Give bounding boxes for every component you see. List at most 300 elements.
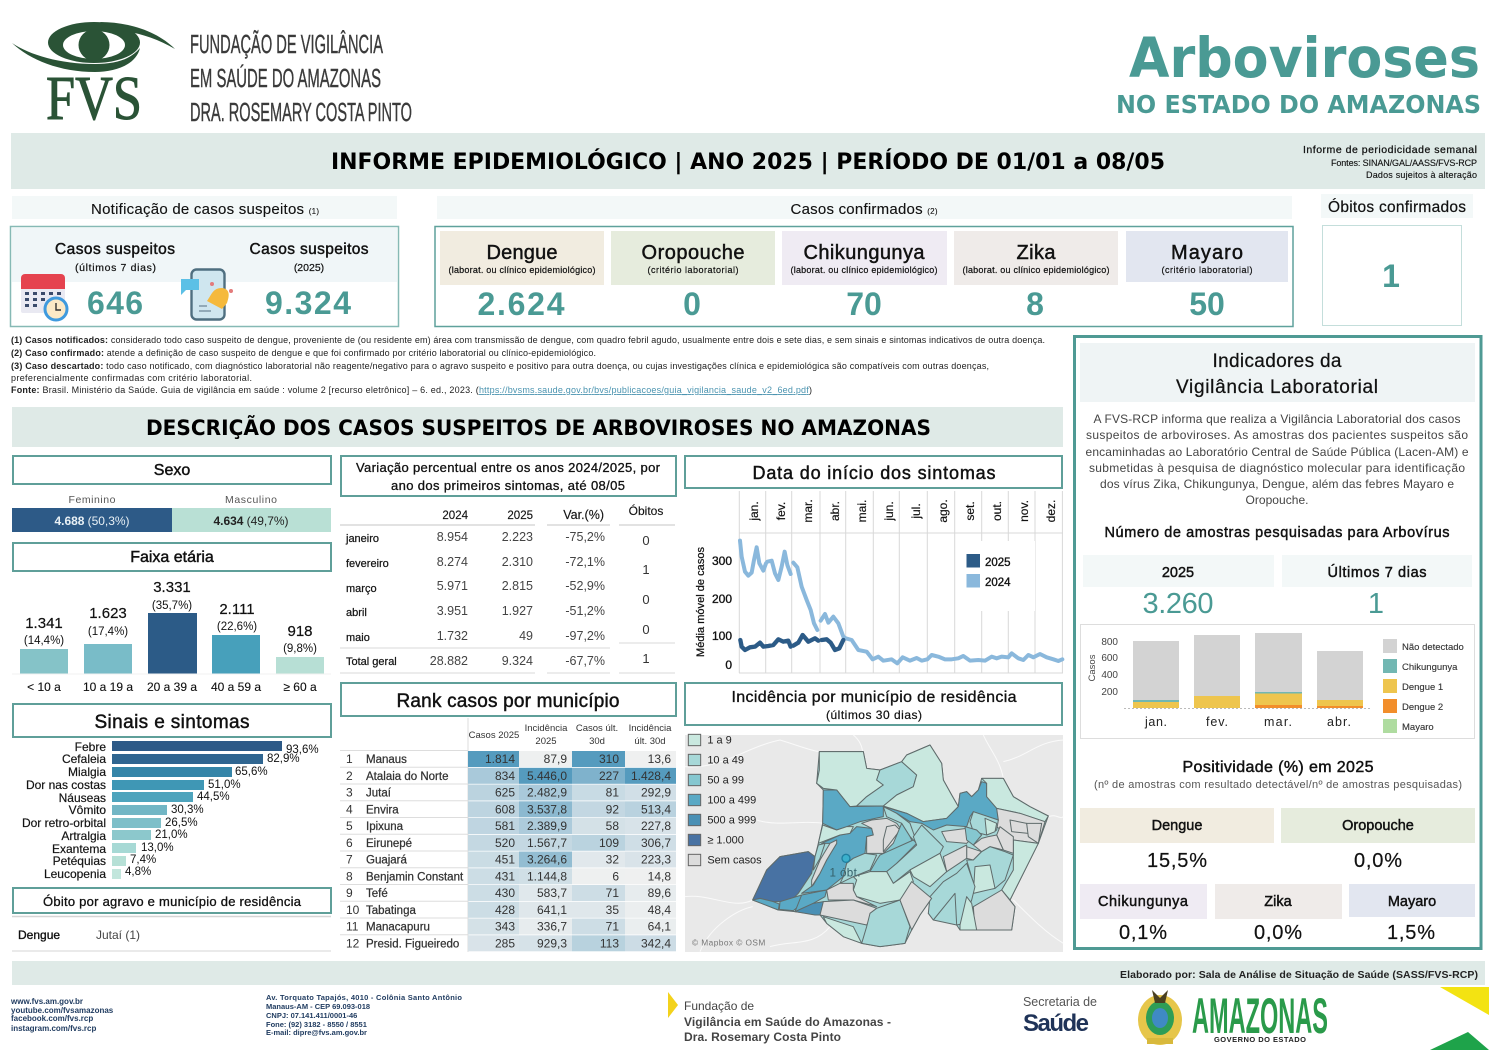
chart: samples per month: mar. xyxy=(1264,715,1292,729)
chart: date of symptom onset: Data do início dos sintomas xyxy=(752,463,996,483)
organisation name: DRA. ROSEMARY COSTA PINTO xyxy=(190,97,412,127)
legend: results: Chikungunya xyxy=(1402,662,1458,673)
table: municipality ranking: 30d xyxy=(589,736,605,747)
logo: Fundação de Vigilância xyxy=(668,992,891,1044)
card: Dengue positivity xyxy=(1080,808,1274,872)
chart: date of symptom onset: Média móvel de casos xyxy=(695,546,707,657)
chart: signs and symptoms: Vômito xyxy=(69,803,106,817)
kpi: last 7 days xyxy=(55,241,175,321)
heading: positivity: Positividade (%) em 2025 xyxy=(1182,759,1374,776)
card: Oropouche xyxy=(611,231,775,322)
table: municipality ranking: 428 xyxy=(495,903,515,917)
chart: samples per month xyxy=(1080,624,1474,738)
table: municipality ranking: 7 xyxy=(346,852,353,866)
chart: signs and symptoms: Febre xyxy=(75,740,106,754)
table: variation 2024/2025: 1.927 xyxy=(502,604,533,618)
table: municipality ranking: 3.264,6 xyxy=(527,852,567,866)
chart: date of symptom onset: mar. xyxy=(801,499,815,523)
chart: signs and symptoms: 13,0% xyxy=(141,842,174,854)
table: municipality ranking: 608 xyxy=(495,802,515,816)
table: municipality ranking: 227,8 xyxy=(641,819,671,833)
chart: samples per month: Casos xyxy=(1087,654,1098,681)
text block: laboratory description: Oropouche. xyxy=(1246,493,1308,507)
kpi: last 7 days: (últimos 7 dias) xyxy=(75,262,156,274)
legend: incidence classes: 1 a 9 xyxy=(707,734,732,746)
table: variation 2024/2025: fevereiro xyxy=(346,558,389,570)
chart: signs and symptoms: 51,0% xyxy=(208,779,241,791)
panel: sex xyxy=(12,456,331,532)
table: municipality ranking: 306,7 xyxy=(641,836,671,850)
chart: age group: Faixa etária xyxy=(130,549,214,566)
text block: address: Av. Torquato Tapajós, 4010 - Colônia Santo Antônio xyxy=(266,993,462,1002)
chart: samples per month: fev. xyxy=(1206,715,1228,729)
panel: suspected notifications xyxy=(10,196,398,326)
table: municipality ranking: 113 xyxy=(600,936,619,950)
bar: march xyxy=(1255,633,1302,708)
chart: date of symptom onset: jun. xyxy=(882,501,896,522)
table: variation 2024/2025: 2025 xyxy=(507,510,533,522)
text block: address: Manaus-AM - CEP 69.093-018 xyxy=(266,1002,370,1011)
table: municipality ranking: últ. 30d xyxy=(634,736,666,747)
table: municipality ranking: 13,6 xyxy=(648,752,671,766)
kpi: 2025: (2025) xyxy=(294,262,324,274)
chart: signs and symptoms: Leucopenia xyxy=(44,867,106,881)
legend: incidence classes: 100 a 499 xyxy=(707,794,756,806)
table: variation 2024/2025: -67,7% xyxy=(565,654,605,668)
table: municipality ranking: 1.144,8 xyxy=(527,869,567,883)
card: Chikungunya: Chikungunya xyxy=(804,242,925,264)
table: municipality ranking: Eirunepé xyxy=(366,838,412,850)
table: variation 2024/2025: maio xyxy=(346,632,370,644)
chart: date of symptom onset: 200 xyxy=(712,592,732,606)
text block: laboratory description: suspeitos de arboviroses. As amostras dos pacientes suspeitos são xyxy=(1086,428,1468,442)
text block: definitions: Fonte: Brasil. Ministério da Saúde. Guia de vigilância em saúde : volume 2 [recurso eletrônico] – 6. ed., 2023. (https://bvsms.saude.gov.br/bvs/publicacoes/guia_vigilancia_saude_v2_6ed.pdf) xyxy=(11,385,812,395)
logo: Secretaria de Saúde: Saúde xyxy=(1023,1010,1089,1037)
text block: web links xyxy=(10,997,114,1033)
table: municipality ranking: 343 xyxy=(495,920,515,934)
chart: age group: (22,6%) xyxy=(217,621,257,633)
table: municipality ranking: 834 xyxy=(495,769,515,783)
logo: FVS xyxy=(12,22,412,133)
card: Oropouche positivity xyxy=(1281,808,1475,872)
card: Zika: Zika xyxy=(1016,242,1056,264)
table: municipality ranking: 6 xyxy=(612,869,619,883)
table: variation 2024/2025: 0 xyxy=(642,622,650,637)
table: variation 2024/2025: 28.882 xyxy=(430,654,468,668)
table: municipality ranking: Casos últ. xyxy=(576,723,618,734)
chart: age group: (17,4%) xyxy=(88,626,128,638)
heading: samples: Número de amostras pesquisadas para Arbovírus xyxy=(1104,525,1450,541)
card: Zika: (laborat. ou clínico epidemiológico) xyxy=(962,265,1110,275)
logo: Fundação de Vigilância: Dra. Rosemary Costa Pinto xyxy=(684,1030,841,1044)
chart: age group: (9,8%) xyxy=(283,643,317,655)
table: municipality ranking: Jutaí xyxy=(366,788,392,800)
chart: signs and symptoms: Dor retro-orbital xyxy=(22,816,106,830)
card: Chikungunya xyxy=(782,231,947,322)
kpi: 2025: 9.324 xyxy=(265,285,351,321)
table: variation 2024/2025: 2.815 xyxy=(502,579,533,593)
table: municipality ranking: Manacapuru xyxy=(366,922,430,934)
text block: definitions: (3) Caso descartado: todo caso notificado, com diagnóstico laboratorial não reagente/negativo para o agravo suspeito e positivo para outra doença, ou cujas investigações clínica e epidemiológica são compatíveis com outras doenças, xyxy=(11,361,989,371)
kpi: samples last 7 days xyxy=(1282,555,1472,620)
legend: results: Dengue 2 xyxy=(1402,702,1443,713)
chart: date of symptom onset: dez. xyxy=(1044,500,1058,522)
table: variation 2024/2025: 1 xyxy=(642,562,650,577)
card: Dengue: 2.624 xyxy=(478,286,565,322)
line: 2024 xyxy=(740,541,1062,663)
chart: signs and symptoms: 4,8% xyxy=(125,866,151,878)
table: municipality ranking: 227 xyxy=(599,769,619,783)
kpi: 2025: Casos suspeitos xyxy=(250,241,369,258)
table: municipality ranking: 3 xyxy=(346,786,353,800)
chart: date of symptom onset: 100 xyxy=(712,629,732,643)
chart: age group: (35,7%) xyxy=(152,600,192,612)
text block: address: Fone: (92) 3182 - 8550 / 8551 xyxy=(266,1020,367,1029)
card: Zika positivity: 0,0% xyxy=(1254,922,1302,944)
map: incidence by municipality: Incidência por município de residência xyxy=(732,689,1017,706)
table: municipality ranking: 431 xyxy=(495,869,515,883)
map: surrounding borders xyxy=(685,735,1063,952)
heading: laboratory indicators: Vigilância Laboratorial xyxy=(1176,377,1378,398)
icon: coat of arms xyxy=(1138,990,1182,1045)
chart: signs and symptoms: Náuseas xyxy=(59,791,106,805)
kpi: last 7 days: 646 xyxy=(87,285,143,321)
table: municipality ranking: 32 xyxy=(606,852,619,866)
table: variation 2024/2025: Total geral xyxy=(346,656,397,668)
table: variation 2024/2025: ano dos primeiros sintomas, até 08/05 xyxy=(391,478,625,493)
card: Mayaro positivity xyxy=(1349,884,1475,944)
chart: age group: 918 xyxy=(287,623,313,640)
footer band xyxy=(12,961,1485,985)
table: variation 2024/2025: 3.951 xyxy=(437,604,468,618)
table: municipality ranking: 48,4 xyxy=(648,903,671,917)
heading: confirmed: Casos confirmados (2) xyxy=(790,201,938,218)
table: municipality ranking: 336,7 xyxy=(537,920,567,934)
card: Chikungunya positivity: 0,1% xyxy=(1119,922,1167,944)
table: variation 2024/2025: 5.971 xyxy=(437,579,468,593)
table: municipality ranking: 1 xyxy=(346,752,353,766)
card: Zika positivity xyxy=(1215,884,1342,944)
table: municipality ranking: 3.537,8 xyxy=(527,802,567,816)
text block: definitions: (1) Casos notificados: considerado todo caso suspeito de dengue, proveniente de (ou residente em) área com transmissão de dengue, com quadro febril agudo, usualmente entre dois e sete dias, e sem sinais e sintomas indicativos de outra doença. xyxy=(11,335,1045,345)
table: municipality ranking: 520 xyxy=(495,836,515,850)
legend: results: Não detectado xyxy=(1402,642,1464,653)
card: Mayaro: (critério laboratorial) xyxy=(1162,265,1252,275)
table: variation 2024/2025: -52,9% xyxy=(565,579,605,593)
card: Oropouche: (critério laboratorial) xyxy=(648,265,738,275)
chart: date of symptom onset: jan. xyxy=(747,501,761,522)
organisation name: FUNDAÇÃO DE VIGILÂNCIA xyxy=(190,29,383,59)
chart: date of symptom onset: mai. xyxy=(855,500,869,522)
card: Zika: 8 xyxy=(1026,286,1044,322)
legend: years xyxy=(966,554,1011,589)
decoration: corner triangles xyxy=(1430,987,1489,1050)
chart: age group: (14,4%) xyxy=(24,635,64,647)
table: municipality ranking: Ipixuna xyxy=(366,821,404,833)
table: municipality ranking: 310 xyxy=(599,752,619,766)
card: Mayaro: Mayaro xyxy=(1171,242,1243,264)
chart: signs and symptoms: Mialgia xyxy=(68,765,106,779)
chart: samples per month: 800 xyxy=(1101,637,1118,648)
table: variation 2024/2025: 0 xyxy=(642,592,650,607)
organisation name: EM SAÚDE DO AMAZONAS xyxy=(190,63,381,93)
logo: Amazonas government: GOVERNO DO ESTADO xyxy=(1214,1035,1306,1044)
table: municipality ranking: 9 xyxy=(346,886,353,900)
heading: positivity xyxy=(1094,759,1462,791)
chart: signs and symptoms: Petéquias xyxy=(53,854,106,868)
legend: incidence classes: 50 a 99 xyxy=(707,774,744,786)
card: Mayaro xyxy=(1126,231,1288,322)
chart: signs and symptoms: 44,5% xyxy=(197,791,230,803)
table: municipality ranking: Guajará xyxy=(366,854,408,866)
heading: report period: INFORME EPIDEMIOLÓGICO | ANO 2025 | PERÍODO DE 01/01 a 08/05 xyxy=(331,149,1165,175)
table: municipality ranking: Envira xyxy=(366,804,399,816)
bar: april xyxy=(1317,651,1363,708)
text block: web links: www.fvs.am.gov.br xyxy=(10,997,83,1006)
card: Chikungunya positivity: Chikungunya xyxy=(1098,894,1189,910)
logo: Amazonas government xyxy=(1138,988,1328,1045)
text block: laboratory description: encaminhadas ao Laboratório Central de Saúde Pública (Lacen-AM) e xyxy=(1086,445,1469,459)
marker: death: 1 óbt. xyxy=(829,867,860,880)
panel: deaths by disease and municipality: Óbito por agravo e município de residência xyxy=(43,894,302,909)
table: municipality ranking: 5.446,0 xyxy=(527,769,567,783)
table: municipality ranking: 12 xyxy=(346,936,360,950)
table: variation 2024/2025: 2.223 xyxy=(502,530,533,544)
chart: age group: 1.623 xyxy=(89,605,127,622)
table: variation 2024/2025: 1.732 xyxy=(437,629,468,643)
heading: laboratory indicators xyxy=(1080,343,1475,402)
text block: laboratory description: submetidas à pesquisa de diagnóstico molecular para identificação xyxy=(1089,461,1465,475)
chart: signs and symptoms: 7,4% xyxy=(130,854,156,866)
table: municipality ranking: Tabatinga xyxy=(366,905,416,917)
table: variation 2024/2025 xyxy=(340,456,676,673)
table: municipality ranking: 1.567,7 xyxy=(527,836,567,850)
logo: Fundação de Vigilância: Vigilância em Saúde do Amazonas - xyxy=(684,1015,891,1029)
table: municipality ranking: 430 xyxy=(495,886,515,900)
heading: notifications: Notificação de casos suspeitos (1) xyxy=(91,201,319,218)
chart: age group: 2.111 xyxy=(219,601,255,618)
card: Dengue: (laborat. ou clínico epidemiológico) xyxy=(448,265,596,275)
legend: results xyxy=(1383,639,1464,733)
card: Mayaro: 50 xyxy=(1189,286,1225,322)
text block: address xyxy=(266,993,462,1037)
footer band: Elaborado por: Sala de Análise de Situação de Saúde (SASS/FVS-RCP) xyxy=(1120,969,1478,981)
legend: incidence classes xyxy=(688,734,762,866)
table: municipality ranking: 10 xyxy=(346,903,360,917)
map: incidence by municipality xyxy=(685,683,1063,952)
title: NO ESTADO DO AMAZONAS xyxy=(1116,90,1481,119)
map: incidence by municipality: (últimos 30 dias) xyxy=(826,708,922,722)
table: municipality ranking: 2 xyxy=(346,769,353,783)
table: municipality ranking: 58 xyxy=(606,819,619,833)
bar: female: 4.688 (50,3%) xyxy=(54,514,130,528)
kpi: samples 2025: 2025 xyxy=(1162,565,1194,581)
text block: address: E-mail: dipre@fvs.am.gov.br xyxy=(266,1028,367,1037)
table: municipality ranking: 2.389,9 xyxy=(527,819,567,833)
table: municipality ranking: 292,9 xyxy=(641,786,671,800)
chart: date of symptom onset: fev. xyxy=(774,502,788,520)
table: municipality ranking: 5 xyxy=(346,819,353,833)
table: variation 2024/2025: Var.(%) xyxy=(563,508,604,522)
panel: sex: Sexo xyxy=(154,462,190,479)
text block: sources: Fontes: SINAN/GAL/AASS/FVS-RCP xyxy=(1331,158,1477,168)
organisation name xyxy=(190,29,412,127)
card: Oropouche positivity: 0,0% xyxy=(1354,850,1402,872)
text block: laboratory description: A FVS-RCP informa que realiza a Vigilância Laboratorial dos casos xyxy=(1094,412,1460,426)
text block: sources: Informe de periodicidade semanal xyxy=(1303,144,1477,156)
legend: incidence classes: 10 a 49 xyxy=(707,754,744,766)
chart: signs and symptoms: Dor nas costas xyxy=(26,778,106,792)
chart: signs and symptoms: 26,5% xyxy=(165,817,198,829)
panel: deaths by disease and municipality: Jutaí (1) xyxy=(96,928,140,942)
table: municipality ranking: 81 xyxy=(606,786,619,800)
line: 2025 xyxy=(740,635,843,650)
table: variation 2024/2025: -75,2% xyxy=(565,530,605,544)
chart: date of symptom onset xyxy=(685,456,1063,673)
chart: signs and symptoms: 65,6% xyxy=(235,766,268,778)
table: municipality ranking: 87,9 xyxy=(544,752,567,766)
bar: male xyxy=(172,508,331,532)
table: variation 2024/2025: 0 xyxy=(642,533,650,548)
kpi: 2025 xyxy=(250,241,369,321)
chart: age group: ≥ 60 a xyxy=(283,680,317,694)
table: municipality ranking: Manaus xyxy=(366,754,407,766)
bar: january xyxy=(1133,641,1179,708)
table: municipality ranking: Benjamin Constant xyxy=(366,871,464,883)
title xyxy=(1116,26,1481,119)
table: municipality ranking xyxy=(340,683,676,952)
map: municipalities xyxy=(753,745,1048,947)
card: Chikungunya positivity xyxy=(1080,884,1207,944)
table: municipality ranking: 71 xyxy=(606,886,619,900)
chart: signs and symptoms: 30,3% xyxy=(171,804,204,816)
table: municipality ranking: 1.814 xyxy=(485,752,515,766)
table: variation 2024/2025: 1 xyxy=(642,651,650,666)
credit: map: © Mapbox © OSM xyxy=(692,938,765,948)
table: municipality ranking: Incidência xyxy=(525,723,568,734)
card: Oropouche positivity: Oropouche xyxy=(1342,818,1414,834)
table: municipality ranking: 285 xyxy=(495,936,515,950)
legend: results: Dengue 1 xyxy=(1402,682,1443,693)
chart: signs and symptoms: 21,0% xyxy=(155,829,188,841)
table: variation 2024/2025: 8.274 xyxy=(437,555,468,569)
table: variation 2024/2025: -72,1% xyxy=(565,555,605,569)
legend: years: 2025 xyxy=(985,557,1011,569)
text block: address: CNPJ: 07.141.411/0001-46 xyxy=(266,1011,357,1020)
panel: laboratory surveillance xyxy=(1074,336,1481,948)
chart: signs and symptoms: Sinais e sintomas xyxy=(94,712,250,733)
chart: signs and symptoms xyxy=(13,704,331,881)
table: municipality ranking: 581 xyxy=(495,819,515,833)
chart: samples per month: abr. xyxy=(1327,715,1351,729)
table: variation 2024/2025: 2.310 xyxy=(502,555,533,569)
heading: positivity: (nº de amostras com resultado detectável/nº de amostras pesquisadas) xyxy=(1094,779,1462,791)
panel: confirmed deaths: 1 xyxy=(1382,258,1400,294)
card: Zika xyxy=(954,231,1118,322)
chart: signs and symptoms: Exantema xyxy=(52,842,106,856)
chart: signs and symptoms: 82,9% xyxy=(267,753,300,765)
banner: description of suspected cases: DESCRIÇÃO DOS CASOS SUSPEITOS DE ARBOVIROSES NO AMAZONAS xyxy=(146,415,931,440)
table: municipality ranking: Incidência xyxy=(629,723,672,734)
text block: definitions: preferencialmente confirmadas com critério laboratorial. xyxy=(11,373,252,383)
table: municipality ranking: 89,6 xyxy=(648,886,671,900)
chart: samples per month: 400 xyxy=(1101,670,1118,681)
text block: definitions: (2) Caso confirmado: atende a definição de caso suspeito de dengue e que foi confirmado por critério laboratorial ou clínico-epidemiológico. xyxy=(11,348,596,358)
chart: date of symptom onset: 0 xyxy=(725,658,732,672)
text: AMAZONAS xyxy=(1192,988,1328,1044)
kpi: samples last 7 days: Últimos 7 dias xyxy=(1328,564,1426,581)
table: municipality ranking: 6 xyxy=(346,836,353,850)
panel: sex: Masculino xyxy=(225,494,277,506)
table: municipality ranking: 4 xyxy=(346,802,353,816)
panel: confirmed deaths xyxy=(1321,194,1473,326)
table: municipality ranking: 8 xyxy=(346,869,353,883)
chart: age group xyxy=(12,543,331,694)
table: municipality ranking: 1.428,4 xyxy=(631,769,671,783)
table: municipality ranking: 71 xyxy=(606,920,619,934)
card: Chikungunya: 70 xyxy=(846,286,882,322)
table: municipality ranking: 64,1 xyxy=(648,920,671,934)
text block: definitions xyxy=(11,335,1045,395)
legend: incidence classes: Sem casos xyxy=(707,854,762,866)
table: municipality ranking: 513,4 xyxy=(641,802,671,816)
panel: sex: Feminino xyxy=(68,494,116,506)
table: municipality ranking: 223,3 xyxy=(641,852,671,866)
chart: age group: < 10 a xyxy=(27,680,61,694)
table: municipality ranking: Presid. Figueiredo xyxy=(366,938,459,950)
table: municipality ranking: 929,3 xyxy=(537,936,567,950)
chart: date of symptom onset: set. xyxy=(963,501,977,521)
card: Zika positivity: Zika xyxy=(1264,894,1293,910)
chart: age group: 1.341 xyxy=(25,615,63,632)
bar: february xyxy=(1194,635,1240,708)
chart: date of symptom onset: ago. xyxy=(936,499,950,523)
chart: age group: 3.331 xyxy=(153,579,191,596)
table: municipality ranking: 641,1 xyxy=(537,903,567,917)
chart: date of symptom onset: 300 xyxy=(712,554,732,568)
text block: sources: Dados sujeitos à alteração xyxy=(1366,170,1477,180)
legend: results: Mayaro xyxy=(1402,722,1434,733)
table: municipality ranking: Atalaia do Norte xyxy=(366,771,448,783)
table: variation 2024/2025: 9.324 xyxy=(502,654,533,668)
card: Dengue positivity: 15,5% xyxy=(1147,850,1207,872)
panel: deaths by disease and municipality: Dengue xyxy=(18,928,60,942)
chart: age group: 40 a 59 a xyxy=(211,680,261,694)
card: Dengue xyxy=(440,231,604,322)
text block: web links: facebook.com/fvs.rcp xyxy=(11,1014,93,1023)
icon: phone with bell xyxy=(181,270,233,320)
title: Arboviroses xyxy=(1129,26,1480,90)
table: municipality ranking: 2.482,9 xyxy=(527,786,567,800)
heading: laboratory indicators: Indicadores da xyxy=(1212,351,1342,372)
table: variation 2024/2025: Variação percentual entre os anos 2024/2025, por xyxy=(356,460,661,475)
text block: web links: youtube.com/fvsamazonas xyxy=(11,1006,114,1015)
chart: date of symptom onset: nov. xyxy=(1017,500,1031,522)
marker: death xyxy=(829,854,860,880)
table: variation 2024/2025: janeiro xyxy=(345,533,379,545)
table: municipality ranking: Casos 2025 xyxy=(469,730,519,741)
table: municipality ranking: 625 xyxy=(495,786,515,800)
logo: Secretaria de Saúde: Secretaria de xyxy=(1023,995,1097,1009)
card: Mayaro positivity: 1,5% xyxy=(1387,922,1435,944)
banner: description of suspected cases xyxy=(12,407,1063,447)
icon: eye xyxy=(12,22,175,72)
bar: female xyxy=(12,508,172,532)
kpi: samples 2025: 3.260 xyxy=(1142,588,1214,620)
banner: period xyxy=(11,133,1485,189)
chart: date of symptom onset: out. xyxy=(990,501,1004,521)
table: municipality ranking: 14,8 xyxy=(648,869,671,883)
